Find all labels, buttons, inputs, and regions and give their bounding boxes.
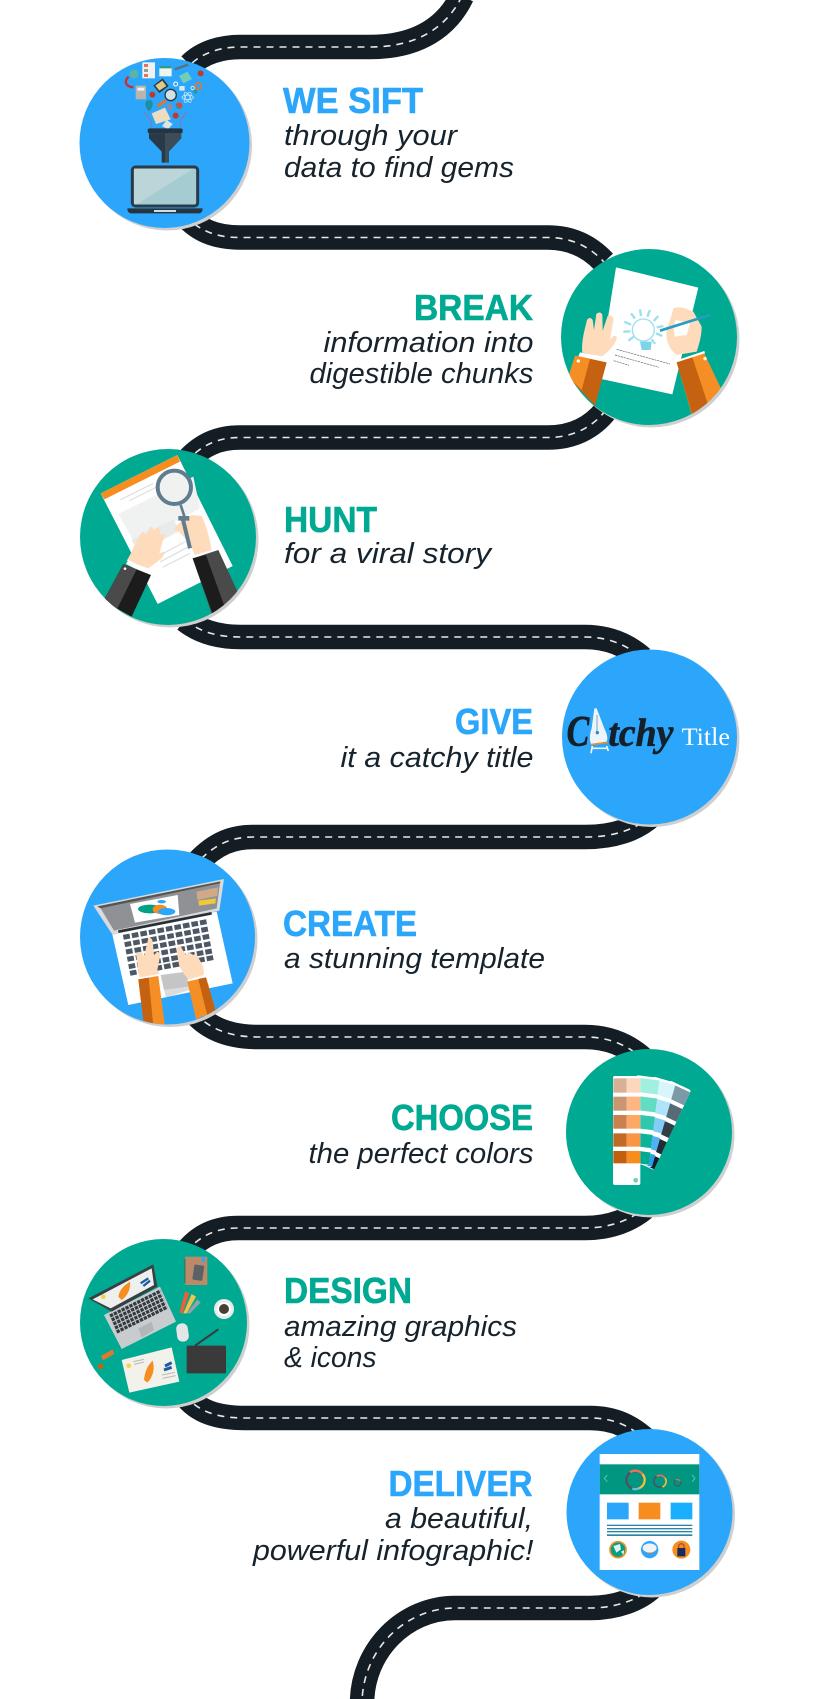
text: the perfect colors: the perfect colors [308,1138,534,1170]
panel: step 6 choose [308,1049,734,1218]
road: exit from step 8 [362,1585,654,1699]
panel: step 8 deliver [252,1429,735,1598]
icon: hands typing on laptop [80,850,258,1027]
heading: hunt: HUNT [284,499,377,540]
panel: step 5 create [80,850,545,1027]
road: step 7 to step 8 [185,1395,648,1442]
icon: hands writing a light bulb idea on paper [561,249,740,428]
road: step 3 to step 4 [185,620,642,658]
panel: step 7 design [80,1239,517,1408]
heading: give: GIVE [455,701,533,742]
text: it a catchy title: it a catchy title [340,742,534,774]
heading: break: BREAK [414,287,533,328]
road: step 1 to step 2 [185,215,604,262]
icon: color swatch fan [566,1049,734,1218]
road: step 2 to step 3 [188,410,606,460]
icon: catchy title logo with pen nib [562,650,740,827]
text: a beautiful,: a beautiful, [385,1503,533,1535]
icon: catchy title logo with pen nib: C [567,708,590,756]
panel: step 3 hunt [80,449,493,628]
text: through your: through your [284,120,458,152]
icon: magnifying glass over document [80,449,258,628]
icon: catchy title logo with pen nib: tchy [608,711,674,755]
text: data to find gems: data to find gems [284,152,514,184]
road: step 5 to step 6 [195,1013,642,1058]
heading: deliver: DELIVER [388,1463,532,1504]
heading: design: DESIGN [284,1270,412,1311]
heading: choose: CHOOSE [391,1097,533,1138]
heading: create: CREATE [283,903,417,944]
text: & icons: & icons [284,1342,376,1374]
heading: we sift: WE SIFT [283,80,423,121]
road: entry to step 1 [190,0,462,65]
panel: step 1 we sift [80,58,514,230]
road: step 6 to step 7 [188,1205,648,1250]
icon: funnel sifting data into laptop [80,58,252,230]
icon: catchy title logo with pen nib: Title [682,723,730,751]
icon: finished infographic page [566,1429,735,1598]
panel: step 2 break [310,249,740,428]
road: step 4 to step 5 [198,815,652,862]
text: digestible chunks: digestible chunks [310,358,534,390]
icon: designer desk flat lay [80,1239,250,1408]
text: for a viral story: for a viral story [284,538,493,570]
panel: step 4 give [340,650,740,827]
text: powerful infographic!: powerful infographic! [252,1535,533,1567]
text: a stunning template: a stunning template [284,943,545,975]
text: amazing graphics: amazing graphics [284,1311,517,1343]
text: information into: information into [324,327,534,359]
